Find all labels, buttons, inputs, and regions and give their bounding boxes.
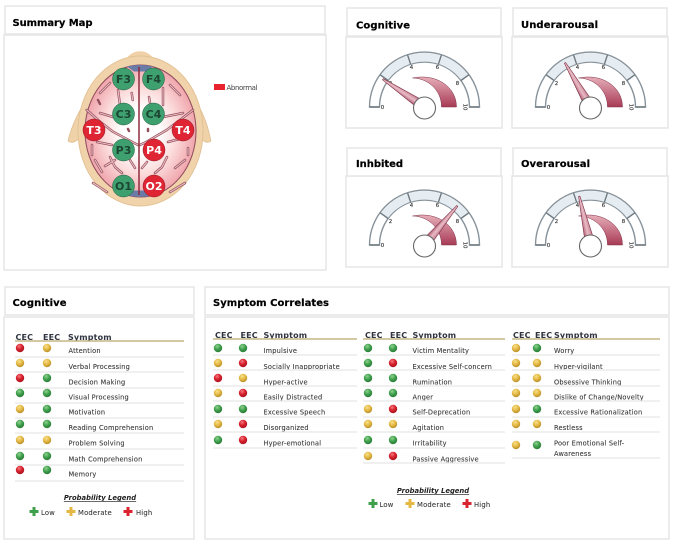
row: Visual Processing [15,389,184,403]
heading: Cognitive: Cognitive [12,298,67,309]
panel: summary map [4,6,326,270]
electrode T4 [172,119,194,141]
row: Disorganized [213,420,357,432]
probability legend [368,487,490,509]
gauge: 4 [410,65,414,71]
electrode C3: C3 [116,108,131,121]
row: Problem Solving [15,436,184,449]
row: Dislike of Change/Novelty: Dislike of Change/Novelty [554,394,644,402]
electrode F3 [112,68,134,90]
gauge [370,190,480,257]
row: Excessive Speech: Excessive Speech [264,408,325,416]
probability legend: Low [41,509,55,517]
gauge: 8 [456,81,460,87]
electrode F4: F4 [146,73,161,86]
row: Decision Making: Decision Making [68,378,125,386]
row: Rumination: Rumination [412,378,452,386]
gauge: 2 [555,81,558,87]
row: Poor Emotional Self-Awareness [512,440,660,458]
heading: Inhbited: Inhbited [356,159,403,170]
row: Agitation [363,420,505,432]
panel: Inhbited gauge [346,148,502,267]
row: Obsessive Thinking: Obsessive Thinking [554,378,621,386]
panel: Overarousal gauge [512,148,668,267]
column 3: EEC [535,331,552,340]
row: Problem Solving: Problem Solving [68,440,125,448]
electrode O2: O2 [145,180,163,193]
row: Reading Comprehension: Reading Comprehension [68,424,153,432]
gauge: 0 [381,243,385,249]
electrode T3: T3 [86,124,102,137]
row: Restless [512,420,660,432]
heading: Overarousal: Overarousal [521,159,590,170]
gauge: 10 [462,104,468,111]
electrode F4 [142,68,164,90]
row: Excessive Self-concern [363,359,505,371]
heading: Symptom Correlates: Symptom Correlates [213,298,329,309]
row: Restless: Restless [554,424,583,432]
row: Excessive Rationalization: Excessive Rationalization [554,408,642,416]
row: Worry: Worry [554,347,574,355]
row: Visual Processing: Visual Processing [68,394,129,402]
gauge: 10 [628,104,634,111]
probability legend: Moderate [78,509,112,517]
row: Memory: Memory [68,470,97,478]
panel: Underarousal gauge [512,8,668,128]
row: Impulsive: Impulsive [264,347,297,355]
electrode P3 [112,139,134,161]
row: Dislike of Change/Novelty [512,389,660,402]
row: Decision Making [15,374,184,388]
probability legend: High [474,501,490,509]
column 1: CEC [215,331,233,340]
gauge: 8 [622,219,626,225]
row: Self-Deprecation: Self-Deprecation [412,408,470,416]
row: Anger: Anger [412,394,433,402]
row: Math Comprehension [15,452,184,465]
electrode P3: P3 [116,144,131,157]
row: Attention: Attention [68,347,101,355]
row: Reading Comprehension [15,420,184,433]
gauge: 2 [389,81,392,87]
row: Self-Deprecation [363,405,505,417]
row: Socially Inappropriate: Socially Inappropriate [264,363,340,371]
row: Attention [15,344,184,357]
gauge: 6 [602,203,606,209]
electrode C4 [142,103,164,125]
row: Hyper-vigilant: Hyper-vigilant [554,363,603,371]
row: Verbal Processing [15,359,184,372]
row: Poor Emotional Self-Awareness: Poor Emotional Self- [554,440,625,448]
table header: CEC [16,333,33,342]
electrode C3 [112,103,134,125]
heading: Cognitive: Cognitive [356,20,410,32]
electrode C4: C4 [146,108,162,121]
row: Excessive Speech [213,405,357,417]
row: Irritability [363,436,505,448]
column 3: Symptom [554,331,598,340]
column 2: Symptom [412,331,456,340]
gauge: 4 [576,203,580,209]
row: Victim Mentality [363,344,505,355]
column 2: EEC [390,331,407,340]
gauge: 0 [547,105,551,111]
gauge: 6 [436,203,440,209]
table header: Symptom [68,333,112,342]
row: Passive Aggressive: Passive Aggressive [412,456,479,464]
row: Agitation: Agitation [412,424,444,432]
column 3 [512,331,660,458]
row: Memory [15,466,184,481]
row: Irritability: Irritability [412,440,447,448]
gauge: 4 [410,203,414,209]
column 3: CEC [513,331,531,340]
row: Hyper-emotional: Hyper-emotional [264,440,321,448]
row: Victim Mentality: Victim Mentality [412,347,469,355]
legend: Abnormal: Abnormal [226,84,258,92]
probability legend [30,494,152,517]
row: Rumination [363,374,505,386]
row: Excessive Self-concern: Excessive Self-concern [412,363,492,371]
row: Obsessive Thinking [512,374,660,386]
electrode O1 [112,175,134,197]
gauge: 0 [547,243,551,249]
gauge: 6 [602,65,606,71]
gauge: 2 [555,219,558,225]
probability legend: Probability Legend [397,487,469,495]
electrode T4: T4 [175,124,191,137]
table header [15,333,184,342]
row: Hyper-active [213,374,357,386]
row: Anger [363,389,505,402]
row: Easily Distracted [213,389,357,402]
panel: Cognitive gauge [346,8,502,128]
panel: Cognitive table [4,287,194,539]
row: Easily Distracted: Easily Distracted [264,394,322,402]
probability legend: High [136,509,152,517]
probability legend: Probability Legend [64,494,136,502]
electrode O1: O1 [115,180,132,193]
electrode P4 [143,139,165,161]
heading: Summary Map: Summary Map [12,18,92,29]
gauge: 10 [628,242,634,249]
panel: Symptom Correlates [205,287,669,539]
row: Worry [512,344,660,355]
row: Socially Inappropriate [213,359,357,371]
column 2 [363,331,505,464]
gauge: 2 [389,219,392,225]
gauge [536,190,646,257]
row: Hyper-vigilant [512,359,660,371]
row: Disorganized: Disorganized [264,424,309,432]
column 1: Symptom [264,331,307,340]
column 1 [213,331,357,448]
row: Hyper-emotional [213,436,357,448]
gauge [536,52,646,119]
row: Math Comprehension: Math Comprehension [68,456,142,464]
gauge [370,52,480,119]
electrode F3: F3 [116,73,131,86]
row: Impulsive [213,344,357,355]
table header: EEC [43,333,60,342]
gauge: 10 [462,242,468,249]
brain map illustration [68,51,211,206]
heading: Underarousal: Underarousal [521,20,598,31]
gauge: 8 [456,219,460,225]
row: Excessive Rationalization [512,405,660,417]
column 2: CEC [365,331,383,340]
row: Verbal Processing: Verbal Processing [68,363,130,371]
probability legend: Moderate [417,501,451,509]
column 1: EEC [240,331,258,340]
row: Hyper-active: Hyper-active [264,378,308,386]
probability legend: Low [380,501,394,509]
row: Poor Emotional Self-Awareness: Awareness [554,450,592,458]
electrode P4: P4 [146,144,162,157]
gauge: 0 [381,105,385,111]
row: Motivation: Motivation [68,408,105,416]
electrode T3 [83,119,105,141]
electrode O2 [143,175,165,197]
gauge: 6 [436,65,440,71]
gauge: 8 [622,81,626,87]
row: Passive Aggressive [363,452,505,464]
gauge: 4 [576,65,580,71]
row: Motivation [15,405,184,418]
